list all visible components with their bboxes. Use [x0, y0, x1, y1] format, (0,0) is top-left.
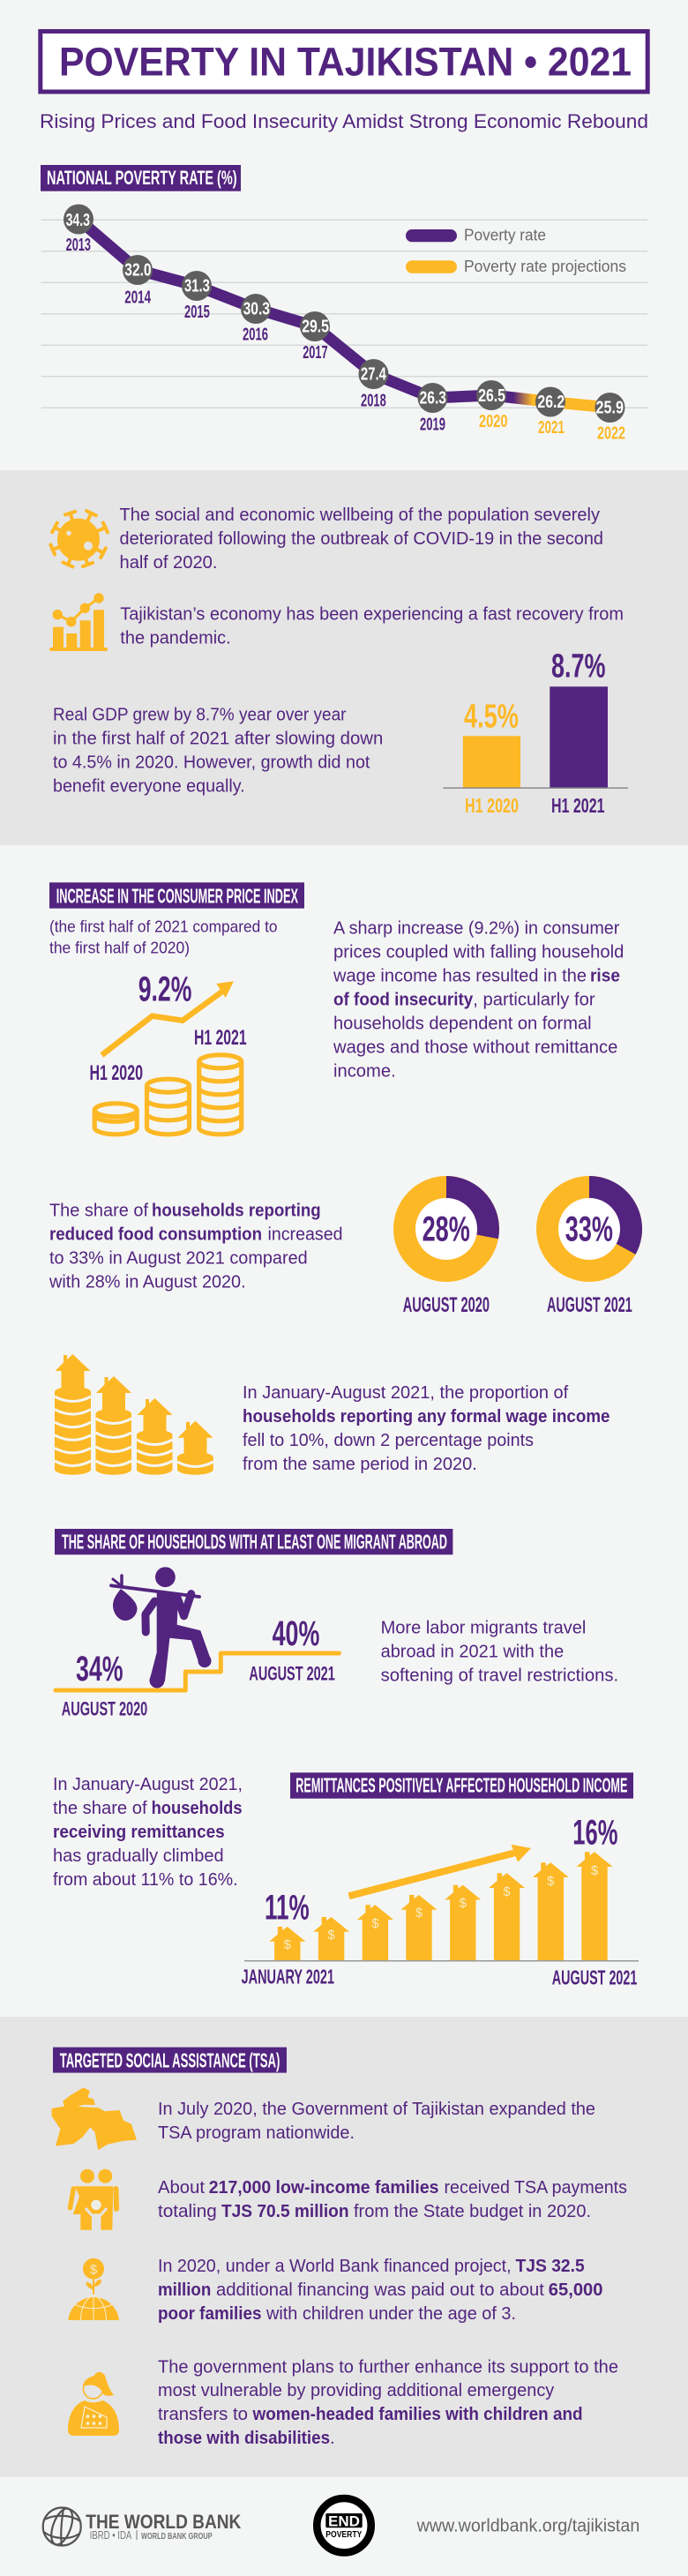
text: households receiving remittances: the share of: [53, 1799, 147, 1818]
text: World Bank financed project: poor families: [158, 2304, 261, 2324]
heading: TSA: [53, 2048, 287, 2073]
line chart: national poverty rate: 27.4: [361, 365, 386, 385]
text: sharp increase: rise: [590, 966, 620, 985]
chart: remittance houses: JANUARY 2021: [242, 1965, 334, 1988]
footer: End Poverty logo: END: [328, 2514, 360, 2530]
chart: migrant climbing stairs: [56, 1567, 339, 1719]
text: World Bank financed project: TJS 32.5: [515, 2257, 585, 2276]
chart: migrant climbing stairs: AUGUST 2020: [62, 1697, 147, 1719]
text: TSA expansion: In July 2020, the Government of Tajikistan expanded the: [158, 2100, 595, 2119]
text: formal wage income: In January-August 2021, the proportion of: [243, 1383, 569, 1403]
text: households receiving remittances: households: [152, 1799, 243, 1818]
line chart: national poverty rate: 26.5: [478, 386, 505, 406]
text: real GDP: Real GDP grew by 8.7% year over year: [53, 705, 347, 724]
text: low-income families: totaling: [158, 2202, 217, 2221]
text: sharp increase: wages and those without remittance: [333, 1037, 617, 1057]
text: low-income families: 217,000 low-income families: [209, 2178, 439, 2198]
text: sharp increase: income.: [333, 1061, 396, 1081]
note: CPI period: the first half of 2020): [49, 940, 190, 957]
line chart: national poverty rate: 25.9: [596, 399, 624, 418]
text: World Bank financed project: additional financing was paid out to about: [216, 2280, 544, 2300]
chart: remittance houses: $: [547, 1874, 555, 1889]
text: government plans: those with disabilities: [158, 2429, 330, 2448]
donut chart: 33% August 2021: [536, 1176, 642, 1317]
text: real GDP: in the first half of 2021 after slowing down: [53, 729, 383, 748]
panel: economic recovery: [0, 470, 688, 845]
chart: remittance houses: $: [460, 1896, 467, 1911]
chart: CPI coins and arrow: H1 2021: [194, 1026, 247, 1050]
line chart: national poverty rate: 2020: [479, 411, 508, 431]
footer: World Bank logo: [43, 2505, 241, 2548]
text: reduced food consumption: households reporting: [152, 1201, 321, 1220]
line chart: national poverty rate: 2019: [420, 414, 445, 434]
icon: virus: [50, 511, 108, 566]
donut chart: 33% August 2021: AUGUST 2021: [547, 1293, 632, 1317]
text: government plans: women-headed families with children and: [252, 2405, 583, 2424]
line chart: national poverty rate: 2013: [66, 235, 91, 255]
bar chart: GDP growth: H1 2021: [551, 794, 605, 817]
text: reduced food consumption: increased: [268, 1224, 342, 1244]
chart: remittance houses: AUGUST 2021: [552, 1966, 638, 1988]
icon: map of Tajikistan: [52, 2088, 136, 2149]
icon: growth chart: [49, 593, 108, 651]
footer: End Poverty logo: [317, 2498, 371, 2552]
footer: End Poverty logo: POVERTY: [325, 2530, 363, 2540]
chart: remittance houses: 11%: [265, 1889, 310, 1928]
text: sharp increase: of food insecurity: [333, 990, 474, 1009]
chart: remittance houses: $: [371, 1916, 379, 1931]
bar chart: GDP growth: 8.7%: [551, 648, 605, 685]
text: World Bank financed project: million: [158, 2280, 211, 2300]
bar chart: GDP growth: [443, 648, 628, 817]
text: social wellbeing: The social and economic wellbeing of the population severely: [120, 505, 600, 525]
footer: World Bank logo: IBRD • IDA: [90, 2529, 132, 2542]
text: sharp increase: households dependent on formal: [333, 1014, 592, 1033]
text: low-income families: TJS 70.5 million: [221, 2202, 349, 2221]
text: World Bank financed project: In 2020, under a World Bank financed project,: [158, 2257, 512, 2276]
text: World Bank financed project: with children under the age of 3.: [265, 2304, 516, 2324]
heading: migrant households: [55, 1529, 452, 1554]
text: sharp increase: , particularly for: [473, 990, 595, 1009]
text: social wellbeing: deteriorated following the outbreak of COVID-19 in the second: [120, 529, 603, 549]
text: households receiving remittances: In January-August 2021,: [53, 1775, 243, 1794]
line chart: national poverty rate: 2016: [243, 324, 268, 344]
line chart: national poverty rate: 34.3: [66, 211, 90, 230]
donut chart: 28% August 2020: [393, 1176, 499, 1317]
panel: targeted social assistance: [0, 2017, 688, 2477]
text: TSA expansion: TSA program nationwide.: [158, 2123, 355, 2143]
line chart: national poverty rate: 2021: [538, 417, 565, 438]
text: low-income families: from the State budget in 2020.: [354, 2202, 591, 2221]
line chart: national poverty rate: 31.3: [184, 277, 210, 296]
heading: national poverty rate: NATIONAL POVERTY RATE (%): [47, 167, 237, 189]
text: households receiving remittances: from about 11% to 16%.: [53, 1870, 238, 1890]
chart: remittance houses: $: [284, 1937, 292, 1952]
text: formal wage income: fell to 10%, down 2 percentage points: [243, 1431, 534, 1450]
line chart: national poverty rate: 26.3: [420, 389, 446, 408]
text: social wellbeing: half of 2020.: [120, 553, 217, 573]
chart: remittance houses: $: [415, 1906, 423, 1921]
chart: remittance houses: $: [591, 1863, 599, 1878]
text: fast recovery: Tajikistan’s economy has been experiencing a fast recovery from: [120, 604, 624, 624]
line chart: national poverty rate: 2014: [124, 287, 151, 307]
text: reduced food consumption: with 28% in August 2020.: [49, 1272, 246, 1292]
text: formal wage income: households reporting any formal wage income: [243, 1407, 610, 1427]
icon: money flower on globe: $: [90, 2262, 98, 2278]
line chart: national poverty rate: 29.5: [302, 318, 329, 337]
icon: money flower on globe: [68, 2258, 119, 2320]
text: fast recovery: the pandemic.: [120, 628, 231, 648]
text: real GDP: benefit everyone equally.: [53, 776, 245, 796]
donut chart: 28% August 2020: 28%: [423, 1210, 470, 1249]
footer: World Bank logo: WORLD BANK GROUP: [141, 2531, 213, 2542]
chart: remittance houses: $: [327, 1928, 335, 1943]
text: government plans: The government plans to further enhance its support to the: [158, 2357, 618, 2377]
heading: consumer price index: [49, 882, 304, 909]
line chart: national poverty rate: 2022: [597, 423, 625, 444]
icon: woman with tablet: [68, 2372, 119, 2436]
line chart: national poverty rate: 26.2: [537, 393, 565, 412]
heading: consumer price index: INCREASE IN THE CONSUMER PRICE INDEX: [56, 884, 298, 907]
text: labor migrants: More labor migrants travel: [381, 1619, 586, 1638]
chart: migrant climbing stairs: 40%: [273, 1614, 319, 1653]
text: real GDP: to 4.5% in 2020. However, growth did not: [53, 753, 370, 772]
icon: migrant with bundle: [111, 1567, 212, 1689]
bar chart: GDP growth: 4.5%: [464, 699, 519, 736]
text: labor migrants: softening of travel restrictions.: [381, 1666, 618, 1686]
text: formal wage income: from the same period in 2020.: [243, 1455, 477, 1474]
text: reduced food consumption: reduced food consumption: [49, 1224, 262, 1244]
line chart: national poverty rate: [41, 205, 647, 444]
text: low-income families: About: [158, 2178, 205, 2198]
donut chart: 28% August 2020: AUGUST 2020: [403, 1293, 490, 1317]
chart: migrant climbing stairs: 34%: [76, 1650, 123, 1689]
text: government plans: .: [330, 2429, 335, 2448]
donut chart: 33% August 2021: 33%: [565, 1210, 613, 1249]
line chart: national poverty rate: 30.3: [243, 300, 270, 319]
chart: remittance houses: [242, 1814, 639, 1988]
chart: remittance houses: 16%: [572, 1814, 617, 1853]
text: World Bank financed project: 65,000: [549, 2280, 603, 2300]
subtitle: Rising Prices and Food Insecurity Amidst Strong Economic Rebound: [40, 110, 648, 132]
text: households receiving remittances: receiving remittances: [53, 1823, 225, 1842]
footer: website: www.worldbank.org/tajikistan: [416, 2516, 639, 2535]
heading: TSA: TARGETED SOCIAL ASSISTANCE (TSA): [60, 2048, 280, 2071]
note: CPI period: (the first half of 2021 compared to: [49, 918, 277, 936]
heading: national poverty rate: [41, 165, 241, 191]
text: households receiving remittances: has gradually climbed: [53, 1846, 224, 1866]
chart: migrant climbing stairs: AUGUST 2021: [249, 1662, 335, 1684]
title: POVERTY IN TAJIKISTAN • 2021: [59, 40, 632, 85]
text: reduced food consumption: to 33% in August 2021 compared: [49, 1248, 308, 1268]
icon: coins with falling arrows: [55, 1354, 213, 1475]
text: sharp increase: A sharp increase (9.2%) in consumer: [333, 918, 620, 938]
text: low-income families: received TSA payments: [445, 2178, 627, 2198]
text: sharp increase: prices coupled with falling household: [333, 942, 624, 962]
chart: CPI coins and arrow: 9.2%: [138, 970, 191, 1009]
chart legend: [406, 227, 626, 275]
chart: CPI coins and arrow: [90, 970, 247, 1134]
footer: World Bank logo: THE WORLD BANK: [86, 2511, 241, 2533]
chart legend: Poverty rate projections: [464, 258, 626, 275]
bar chart: GDP growth: H1 2020: [465, 794, 519, 817]
line chart: national poverty rate: 2015: [184, 302, 210, 322]
line chart: national poverty rate: 32.0: [124, 261, 152, 281]
text: sharp increase: wage income has resulted in the: [333, 966, 587, 985]
chart legend: Poverty rate: [464, 227, 546, 244]
chart: CPI coins and arrow: H1 2020: [90, 1061, 143, 1085]
text: reduced food consumption: The share of: [49, 1201, 148, 1220]
text: government plans: transfers to: [158, 2405, 248, 2424]
text: labor migrants: abroad in 2021 with the: [381, 1643, 564, 1662]
line chart: national poverty rate: 2018: [361, 390, 386, 410]
chart: remittance houses: $: [503, 1884, 511, 1899]
text: government plans: most vulnerable by providing additional emergency: [158, 2381, 554, 2400]
icon: family: [71, 2169, 116, 2230]
line chart: national poverty rate: 2017: [303, 342, 328, 363]
